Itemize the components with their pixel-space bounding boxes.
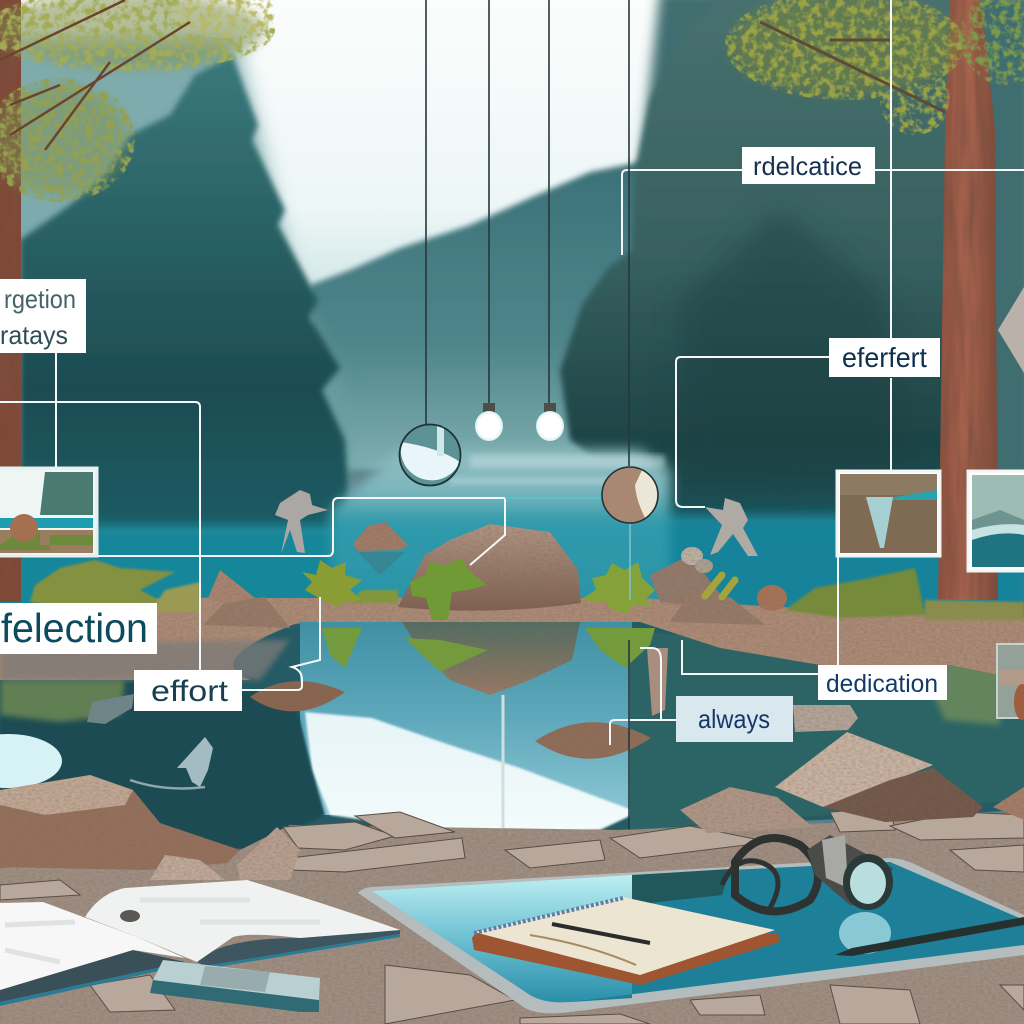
diamond shape right edge (998, 287, 1024, 373)
round lens water (399, 424, 461, 486)
label: always: always (698, 704, 770, 734)
hanging bulb right (536, 403, 564, 441)
hanging bulb left (475, 403, 503, 441)
label: rdelcatice (742, 147, 875, 184)
grass (30, 560, 1024, 620)
ground bank (0, 598, 1024, 680)
thumbnail water channel (837, 471, 940, 556)
boulders on bank (203, 522, 787, 628)
reflected green left (0, 680, 125, 722)
small sky reflection left (0, 734, 62, 788)
thumbnail left (0, 468, 97, 556)
label: dedication: dedication (826, 670, 938, 698)
ferns (302, 558, 735, 620)
lake (0, 450, 1024, 620)
top-left foliage (0, 0, 280, 205)
label: effort (134, 670, 242, 711)
label: rgetion ratays (0, 279, 86, 353)
figure right (705, 498, 758, 556)
reflected ferns (322, 628, 655, 672)
right tree trunk (938, 0, 998, 600)
binoculars (722, 835, 893, 954)
stone floor (0, 808, 1024, 1024)
round lens stone (602, 467, 658, 523)
reflected left tree (0, 680, 325, 850)
reflected sky (300, 620, 632, 815)
floating stones (250, 681, 858, 759)
eraser (150, 960, 320, 1012)
pencil (835, 917, 1024, 956)
foreground rocks (0, 732, 1024, 880)
label: rgetion ratays: ratays (0, 320, 68, 350)
reflected green right (920, 665, 1000, 725)
tablet (358, 858, 1024, 1013)
thumbnail lower right (997, 644, 1024, 720)
reflected post (647, 648, 668, 716)
left conifer forest (0, 40, 350, 540)
notebook (472, 897, 780, 985)
sky (0, 0, 1024, 460)
reflection pool (0, 620, 1024, 860)
reflected figure (130, 737, 213, 788)
top-right foliage (720, 0, 1024, 140)
label: eferfert: eferfert (842, 342, 927, 373)
hanging cord lower (629, 524, 631, 600)
hanging cords (426, 0, 629, 830)
label: rgetion ratays: rgetion (4, 284, 76, 314)
thumbnail rapids (968, 471, 1024, 571)
reflected white clouds (305, 712, 632, 835)
label: felection: felection (1, 605, 148, 651)
label: eferfert (829, 338, 940, 377)
right conifer forest (560, 0, 1024, 520)
reflection of small rock (358, 552, 405, 575)
figure left (275, 490, 328, 554)
grey reflected stone (87, 694, 134, 724)
label: rdelcatice: rdelcatice (753, 151, 862, 181)
left tree trunk (0, 0, 21, 602)
label: always (676, 696, 793, 742)
forested hills (310, 160, 670, 470)
reflected right forest (630, 630, 1024, 830)
reflected central rock (402, 622, 580, 695)
label: effort: effort (151, 675, 229, 708)
open book (0, 880, 400, 1006)
wet band left (0, 640, 290, 680)
